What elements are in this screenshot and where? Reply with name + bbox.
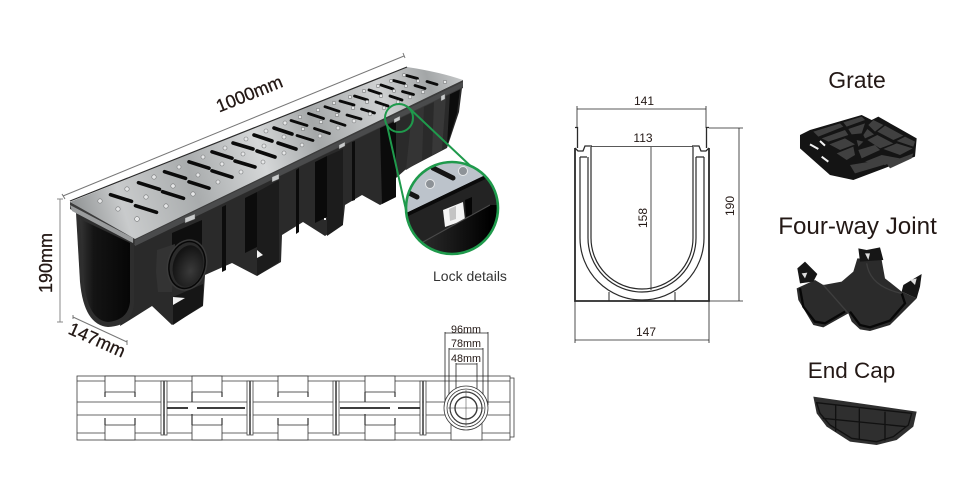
cross-section drawing xyxy=(575,106,743,343)
steel grate top xyxy=(70,67,463,239)
plan view dimension labels: 96mm xyxy=(451,324,481,336)
lock tabs xyxy=(185,94,445,223)
cross-section labels: 147 xyxy=(636,325,656,339)
part: grate xyxy=(800,115,917,180)
magnifier ring xyxy=(406,162,498,254)
end face xyxy=(76,213,134,327)
part: end cap xyxy=(813,397,917,445)
cross-section labels: 190 xyxy=(723,196,737,216)
plan view dimension labels: 48mm xyxy=(451,353,481,365)
cross-section labels xyxy=(633,94,737,339)
grate underside edge xyxy=(70,80,463,246)
outlet foot and pipe circles xyxy=(444,332,488,440)
heading: Grate: Grate xyxy=(828,67,886,93)
plan view centre slots xyxy=(167,407,420,409)
plan view notches xyxy=(105,376,395,440)
U channel walls xyxy=(580,157,704,300)
small highlight circle xyxy=(385,104,413,132)
grate tray slots xyxy=(810,141,828,162)
dimension: length 1000mm xyxy=(62,53,405,199)
cross-section labels: 141 xyxy=(634,94,654,108)
plan view dimension labels xyxy=(451,324,481,365)
dimension lines xyxy=(575,106,743,343)
cross-section labels: 113 xyxy=(633,131,653,145)
dimension: length 1000mm: 1000mm xyxy=(213,72,286,116)
infographic canvas xyxy=(38,52,937,445)
lock detail callout xyxy=(385,104,500,260)
top flanges xyxy=(575,128,709,157)
plan view cross bars xyxy=(161,381,426,435)
foot openings xyxy=(173,297,185,305)
channel body xyxy=(120,88,462,326)
plan view dimension labels: 78mm xyxy=(451,338,481,350)
joint rims xyxy=(800,288,905,327)
heading: End Cap: End Cap xyxy=(808,358,895,383)
label: lock details: Lock details xyxy=(433,268,507,284)
magnified lock view xyxy=(407,163,497,253)
grate slots xyxy=(110,76,437,212)
callout connector lines xyxy=(387,107,478,210)
joint mounting tabs xyxy=(797,247,922,298)
body ribs and feet xyxy=(172,89,460,325)
dimension: height 190mm: 190mm xyxy=(36,233,56,293)
grate web openings xyxy=(813,117,915,173)
dimension: width 147mm: 147mm xyxy=(66,319,128,361)
plan view drawing xyxy=(77,332,514,440)
pipe socket xyxy=(156,235,213,295)
outer outline xyxy=(575,148,709,301)
part: four-way joint xyxy=(797,247,922,331)
grate bolts xyxy=(98,73,447,221)
product: drain channel with steel grate xyxy=(70,67,463,327)
heading: Four-way Joint: Four-way Joint xyxy=(778,213,937,240)
dimension: height 190mm xyxy=(36,199,63,322)
cross-section labels: 158 xyxy=(636,208,650,228)
base feet xyxy=(609,292,675,301)
